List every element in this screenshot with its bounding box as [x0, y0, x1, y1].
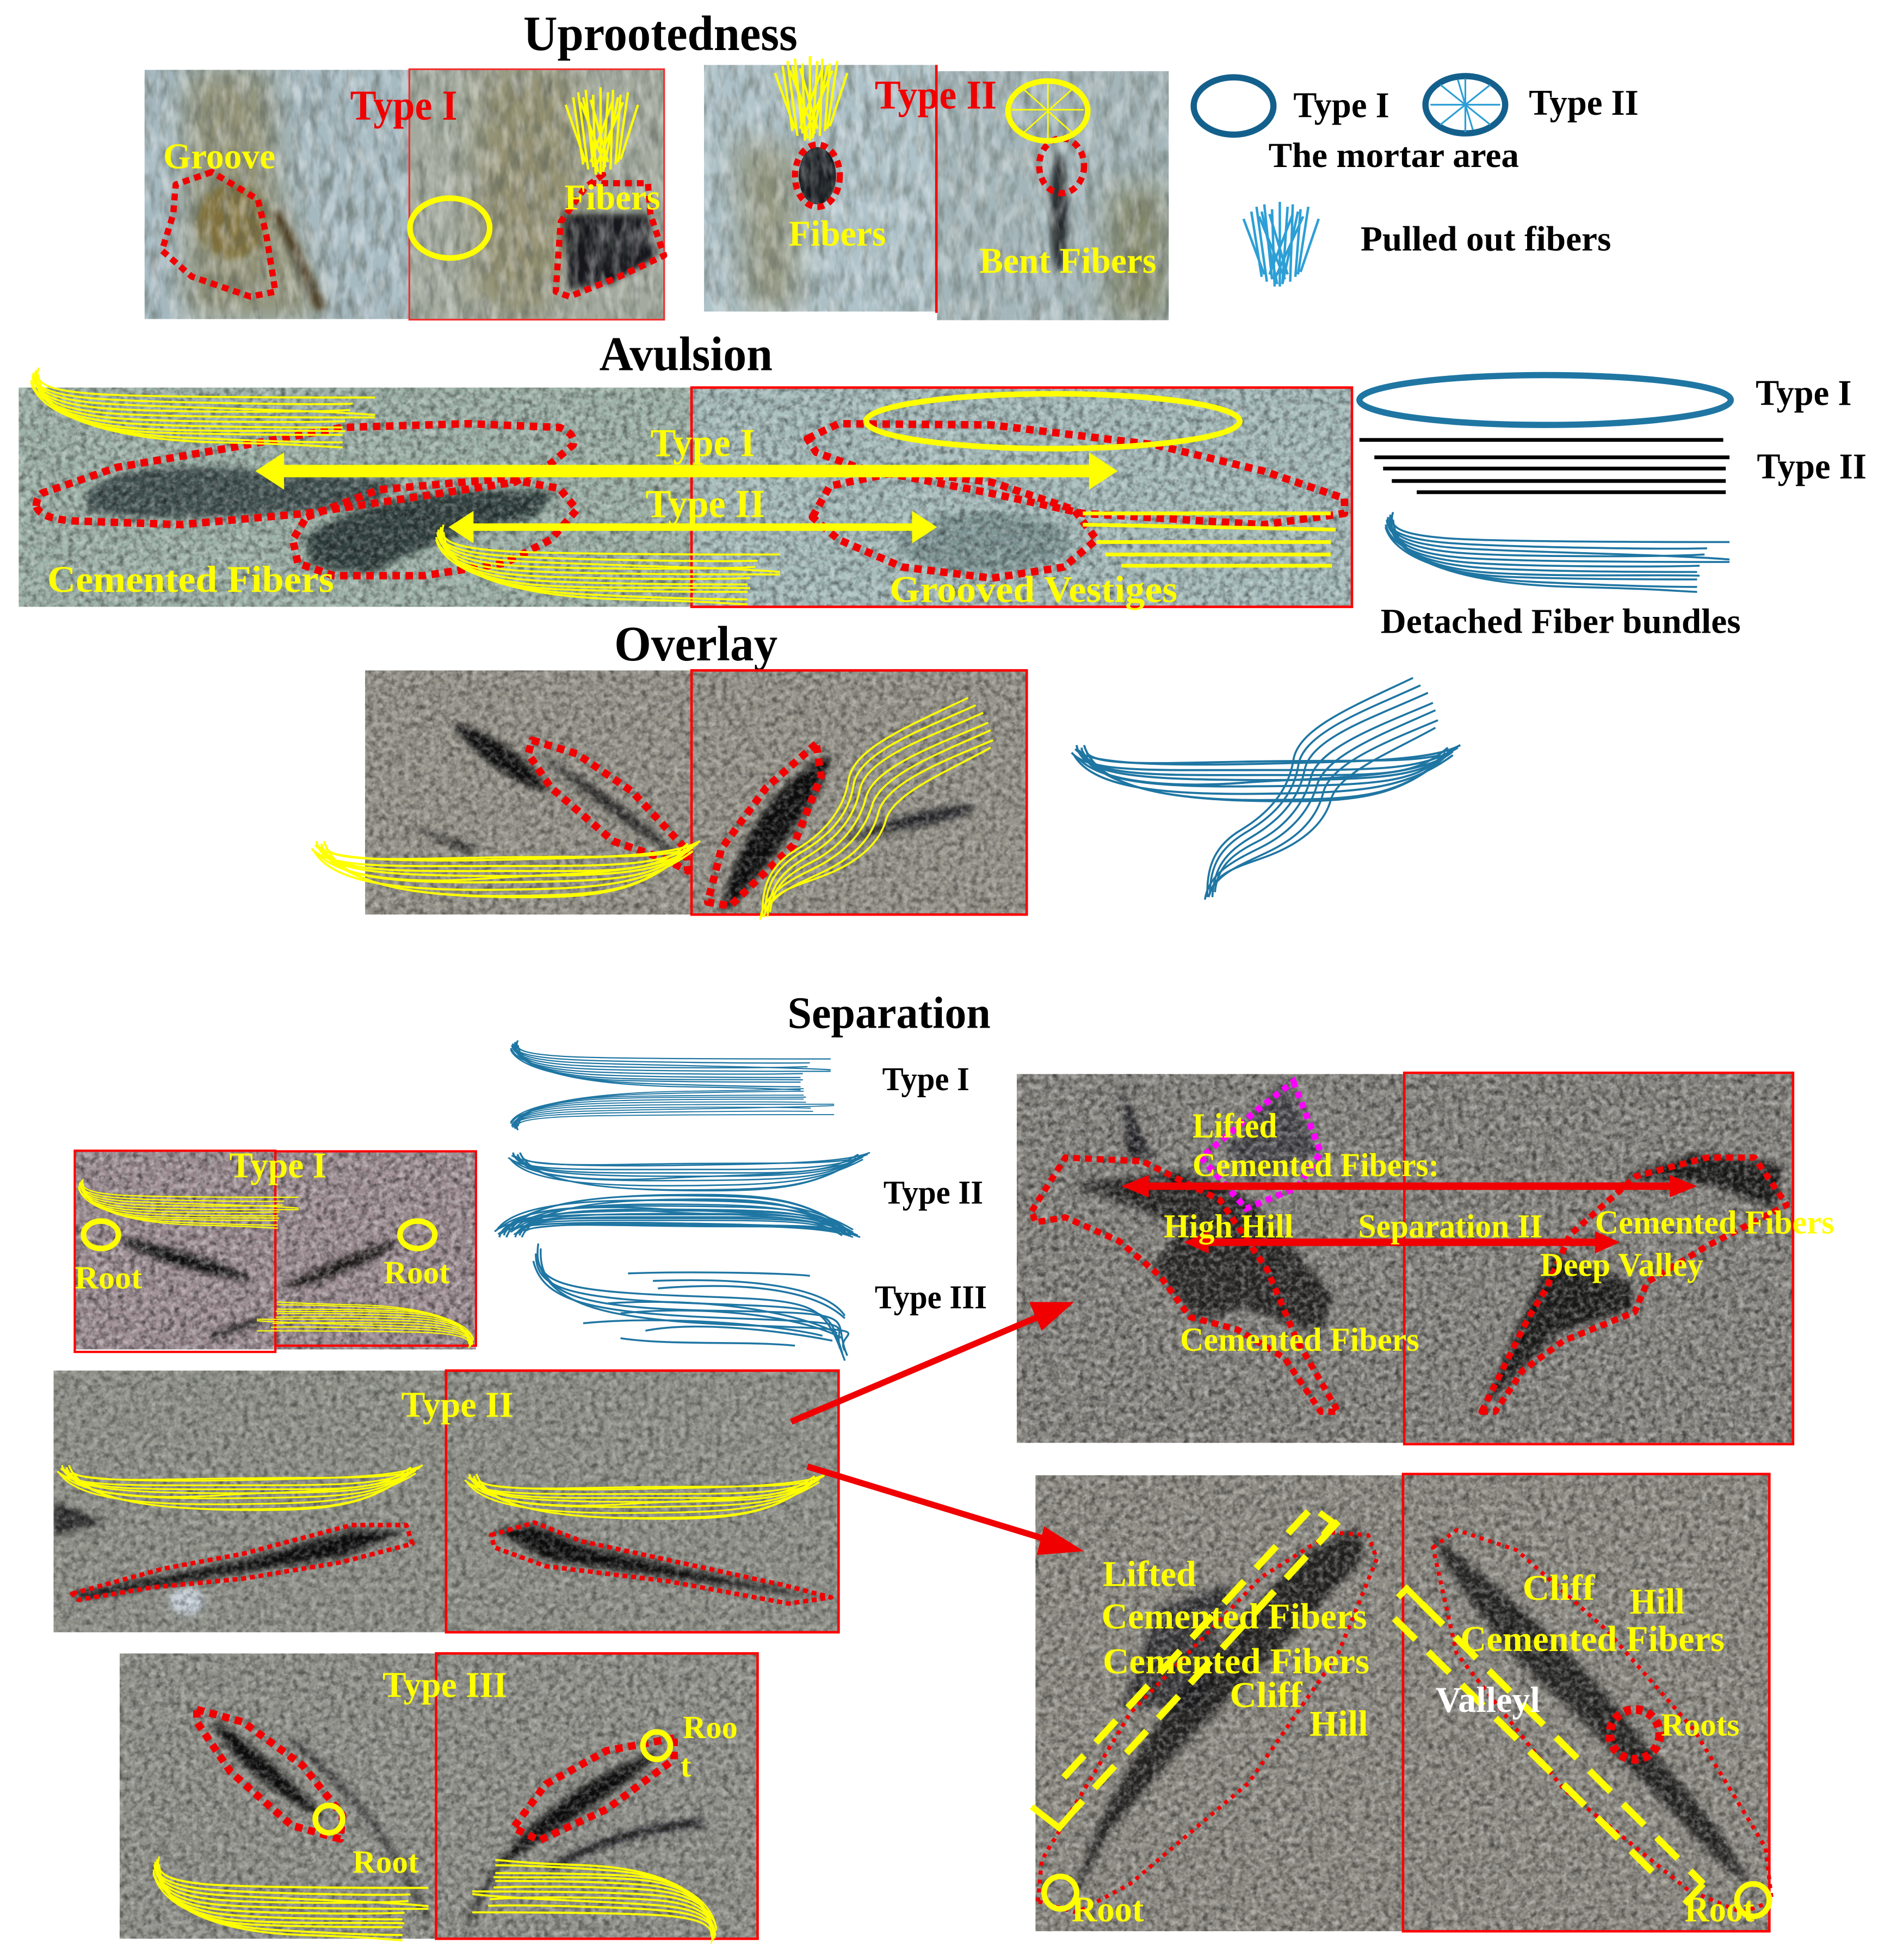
photo: Type II fibers — [704, 65, 1169, 320]
icon: yellow lens bundle — [312, 841, 700, 897]
icon: yellow lens bundles — [57, 1466, 826, 1519]
icon: yellow S-curve bundle — [760, 698, 993, 919]
annotation: red dotted outlines — [1031, 1158, 1787, 1412]
photo: lower detail — [1035, 1474, 1769, 1931]
annotation: red dotted outlines — [197, 1709, 674, 1840]
label: Type I: Type I — [882, 1061, 969, 1098]
label: High Hill: High Hill — [1164, 1208, 1293, 1245]
annotation: root circles — [315, 1732, 670, 1833]
arrow: to lower detail — [807, 1467, 1084, 1555]
section: Separation — [53, 988, 1834, 1944]
section: Uprootedness — [145, 5, 1639, 320]
label: The mortar area: The mortar area — [1269, 136, 1519, 175]
label: Detached Fiber bundles: Detached Fiber bundles — [1381, 602, 1741, 641]
photo: Type I groove and fibers — [145, 69, 664, 320]
annotation: red dotted outlines — [528, 740, 821, 906]
label: Roots: Roots — [1661, 1707, 1739, 1743]
label: Cemented Fibers: Cemented Fibers — [47, 559, 334, 600]
label: Root: Root — [1072, 1890, 1144, 1930]
label: Cemented Fibers:: Cemented Fibers: — [1193, 1147, 1439, 1184]
annotation: root circles — [1044, 1876, 1769, 1916]
icon: blue Type II bundles — [495, 1153, 870, 1237]
photo: Type I separation — [75, 1151, 476, 1352]
annotation: mortar ellipse — [866, 394, 1240, 449]
annotation: thin red dotted outlines — [1038, 1530, 1772, 1913]
label: Type I: Type I — [651, 421, 755, 465]
label: Type III: Type III — [875, 1279, 987, 1316]
legend: mortar area — [1194, 76, 1639, 175]
label: Bent Fibers: Bent Fibers — [979, 242, 1156, 281]
annotation: red dotted outlines — [72, 1523, 831, 1604]
legend: Type II lines — [1360, 440, 1729, 492]
icon: blue Type III bundles — [533, 1244, 849, 1361]
section: Overlay — [312, 616, 1460, 919]
annotation: red dotted fiber outlines — [36, 424, 1344, 578]
label: Roo: Roo — [683, 1709, 738, 1745]
label: Cemented Fibers: Cemented Fibers — [1180, 1321, 1419, 1358]
arrow: Type II span — [449, 511, 937, 543]
photo: upper detail — [1017, 1073, 1793, 1444]
icon: blue Type I bundles — [511, 1041, 834, 1130]
label: Type II: Type II — [1757, 447, 1867, 487]
annotation: yellow dashed lifted channel — [1031, 1511, 1338, 1828]
label: Type II: Type II — [401, 1385, 514, 1425]
annotation: root circles — [83, 1221, 435, 1248]
label: Cemented Fibers: Cemented Fibers — [1102, 1597, 1367, 1637]
icon: blue overlaid fibers — [1072, 678, 1460, 900]
label: Cemented Fibers: Cemented Fibers — [1103, 1642, 1369, 1681]
icon: blue fan of fibers — [1244, 202, 1319, 287]
label: Hill: Hill — [1630, 1582, 1685, 1622]
label: Type I: Type I — [1293, 85, 1389, 125]
annotation: mortar circle — [410, 198, 490, 258]
label: Deep Valley: Deep Valley — [1540, 1246, 1703, 1283]
icon: straight fiber lines — [1083, 514, 1336, 566]
label: Cliff: Cliff — [1230, 1675, 1302, 1715]
label: Root: Root — [75, 1259, 142, 1295]
label: Type II: Type II — [1529, 83, 1639, 123]
icon: yellow fan of fibers — [775, 56, 847, 141]
arrow: Separation II span — [1184, 1231, 1620, 1253]
label: Hill: Hill — [1309, 1704, 1368, 1744]
label: t: t — [681, 1748, 691, 1784]
label: Type I: Type I — [1756, 374, 1851, 413]
label: Type I: Type I — [229, 1146, 326, 1186]
photo: Overlay surface — [365, 670, 1027, 914]
label: Groove: Groove — [163, 137, 275, 176]
icon: blue detached fiber bundle — [1386, 512, 1729, 592]
icon: Type II mortar ellipse — [1425, 76, 1505, 133]
photo: Type III separation — [120, 1653, 758, 1939]
legend: Type I ellipse — [1360, 375, 1731, 425]
annotation: yellow dashed valley channel — [1394, 1588, 1703, 1904]
title: Uprootedness: Uprootedness — [523, 5, 798, 61]
icon: detached fiber bundle — [31, 368, 375, 447]
icon: yellow bundles — [78, 1179, 473, 1348]
photo: Type II separation — [53, 1371, 838, 1632]
annotation: fiber outline — [555, 175, 664, 296]
label: Separation II: Separation II — [1358, 1208, 1542, 1245]
label: Type II: Type II — [884, 1174, 983, 1211]
label: Root: Root — [1685, 1890, 1755, 1930]
icon: detached fiber bundle — [436, 524, 780, 604]
label: Cemented Fibers: Cemented Fibers — [1460, 1619, 1725, 1659]
section: Avulsion — [18, 327, 1867, 641]
title: Overlay: Overlay — [614, 616, 777, 671]
title: Separation: Separation — [787, 988, 991, 1038]
icon: yellow bundles — [153, 1857, 716, 1944]
annotation: groove outline — [162, 172, 275, 296]
label: Cemented Fibers: Cemented Fibers — [1595, 1204, 1834, 1241]
label: Type II: Type II — [875, 72, 997, 118]
annotation: roots outline — [1610, 1709, 1660, 1759]
label: Fibers: Fibers — [789, 214, 886, 253]
label: Type II: Type II — [645, 482, 765, 526]
label: Root: Root — [353, 1844, 419, 1880]
title: Avulsion: Avulsion — [600, 327, 773, 381]
annotation: fiber hole outlines — [795, 138, 1084, 207]
label: Type I: Type I — [350, 82, 458, 129]
label: Lifted: Lifted — [1103, 1555, 1196, 1594]
label: Type III: Type III — [382, 1666, 507, 1705]
label: Grooved Vestiges: Grooved Vestiges — [890, 568, 1177, 610]
label: Valleyl: Valleyl — [1435, 1680, 1540, 1720]
arrow: to upper detail — [791, 1302, 1074, 1421]
label: Cliff: Cliff — [1523, 1568, 1596, 1608]
legend: pulled out fibers — [1244, 202, 1611, 287]
annotation: magenta dotted outline — [1201, 1081, 1321, 1209]
arrow: Type I span — [256, 453, 1117, 490]
arrow: upper red span — [1121, 1175, 1697, 1197]
label: Root: Root — [384, 1254, 450, 1290]
label: Pulled out fibers: Pulled out fibers — [1361, 220, 1611, 258]
icon: mortar area with star lines — [1008, 81, 1088, 141]
label: Fibers: Fibers — [565, 178, 660, 218]
label: Lifted: Lifted — [1193, 1106, 1277, 1145]
photo: Avulsion surface — [18, 387, 1352, 607]
icon: yellow fan of fibers — [566, 87, 638, 175]
icon: Type I mortar ellipse — [1194, 77, 1274, 135]
